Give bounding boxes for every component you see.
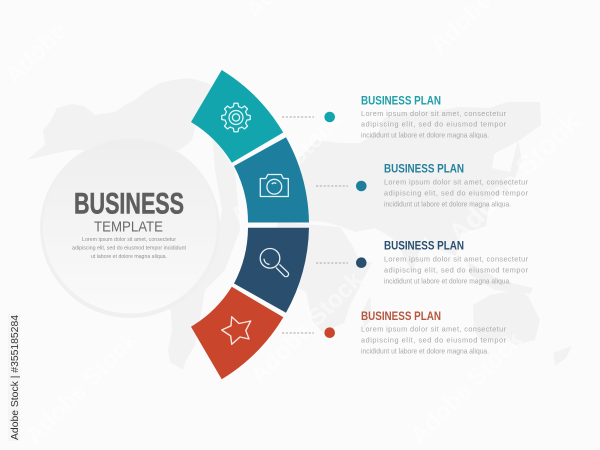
segment 4: red [191, 287, 283, 379]
icon: gear [222, 103, 250, 132]
watermark: Adobe Stock [245, 266, 368, 389]
text block 2: BUSINESS PLAN [384, 162, 464, 176]
connector 3 [316, 257, 367, 268]
text block 3: adipiscing elit, sed do eiusmod tempor [384, 266, 529, 274]
world map [27, 78, 572, 370]
text block 3: incididunt ut labore et dolore magna aliqua. [384, 276, 511, 286]
stock id label: Adobe Stock | #355185284 [9, 315, 21, 440]
icon: magnifier [260, 248, 289, 277]
text block 1: BUSINESS PLAN [361, 93, 441, 107]
connector 4 [282, 327, 335, 338]
watermark: Adobe Stock [20, 326, 143, 449]
text block 4: adipiscing elit, sed do eiusmod tempor [361, 336, 507, 344]
text block 3: Lorem ipsum dolor sit amet, consectetur [384, 254, 529, 264]
text block 2: incididunt ut labore et dolore magna aliqua. [384, 200, 511, 208]
segment 1: teal [191, 70, 283, 163]
text block 1: incididunt ut labore et dolore magna aliqua. [361, 130, 489, 140]
watermark: Adobe Stock [225, 106, 348, 229]
watermark: Adobe [0, 17, 72, 89]
circle subheading: TEMPLATE [94, 218, 163, 236]
connector 1 [282, 112, 335, 122]
text block 2 [384, 162, 529, 208]
segment 2: blue [234, 137, 309, 222]
text block 3 [384, 238, 529, 286]
text block 4: BUSINESS PLAN [361, 309, 441, 323]
text block 2: adipiscing elit, sed do eiusmod tempor [384, 188, 529, 198]
circle text: ut labore et dolore magna aliqua. [91, 254, 167, 260]
icon: star [222, 317, 251, 344]
text block 1: Lorem ipsum dolor sit amet, consectetur [361, 109, 507, 118]
text block 2: Lorem ipsum dolor sit amet, consectetur [384, 178, 529, 186]
text block 4: Lorem ipsum dolor sit amet, consectetur [361, 324, 507, 334]
text block 1 [361, 93, 507, 140]
circle heading: BUSINESS [74, 188, 184, 220]
text block 3: BUSINESS PLAN [384, 238, 464, 252]
watermark: Adobe Stock [442, 106, 586, 249]
text block 4: incididunt ut labore et dolore magna aliqua. [361, 346, 489, 356]
icon: camera [260, 174, 288, 196]
circle text: adipiscing elit, sed do eiusmod tempor incididunt [72, 246, 186, 252]
text block 1: adipiscing elit, sed do eiusmod tempor [361, 120, 507, 128]
circle text: Lorem ipsum dolor sit amet, consectetur [82, 237, 176, 243]
connector 2 [316, 181, 367, 191]
watermark: Adobe Stock [405, 326, 528, 449]
circle text [72, 237, 186, 260]
center circle [40, 138, 220, 318]
segment 3: navy [234, 228, 309, 313]
text block 4 [361, 309, 507, 356]
